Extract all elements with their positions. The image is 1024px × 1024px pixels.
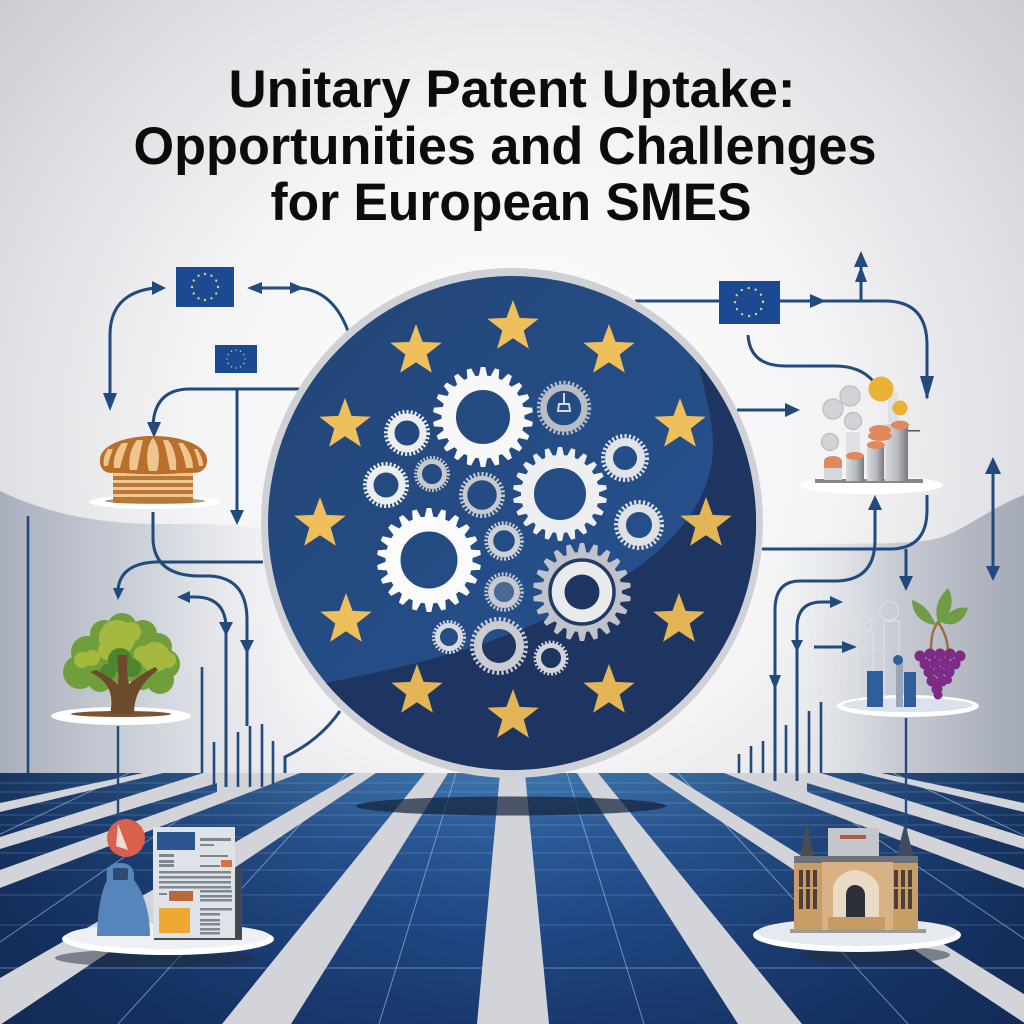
cake on plate <box>89 436 221 509</box>
connector arrows: left <box>110 288 348 822</box>
bottom left disc shadow <box>55 949 255 967</box>
columns <box>846 455 864 481</box>
left hill <box>0 491 320 775</box>
bottom right plate with building <box>753 823 961 952</box>
grey coins <box>822 386 862 450</box>
red sign <box>107 819 145 857</box>
large gear 2 <box>513 447 607 541</box>
right hill <box>760 495 1024 775</box>
EU flag top right <box>719 281 780 324</box>
wireframe chart <box>856 602 899 706</box>
arrowheads on right connectors <box>769 251 1001 690</box>
tiled floor <box>0 773 1024 1024</box>
facade <box>794 860 918 930</box>
bottom left plate with robot and newspaper <box>62 819 274 955</box>
small gears <box>365 382 662 674</box>
spires <box>800 823 814 858</box>
large gear 3 <box>377 508 481 612</box>
newspaper <box>153 827 242 940</box>
stars <box>294 300 732 738</box>
bottom right disc shadow <box>800 946 950 964</box>
sign <box>828 828 879 856</box>
blue bars <box>867 655 916 707</box>
central EU circle <box>261 268 763 778</box>
tree on plate <box>51 613 191 725</box>
blue robot <box>97 863 150 936</box>
shadow under circle <box>356 796 666 816</box>
title: for European SMES <box>270 173 752 232</box>
vertical bars right <box>739 702 821 773</box>
EU flag top left <box>176 267 234 307</box>
vertical bars left <box>28 516 273 787</box>
grape bunch <box>931 622 948 650</box>
chart and grapes on plate <box>837 588 979 717</box>
large gear 4 <box>533 543 631 641</box>
title: Opportunities and Challenges <box>134 117 876 176</box>
EU flag small <box>215 345 257 373</box>
title <box>134 60 876 232</box>
large gear 1 <box>433 367 533 467</box>
coins and columns on plate <box>799 376 943 494</box>
copper coins <box>824 420 909 468</box>
dark crescent <box>326 363 756 770</box>
connector arrows: right <box>635 262 993 835</box>
title: Unitary Patent Uptake: <box>228 60 796 119</box>
arrowheads on left connectors <box>103 281 304 654</box>
floor stripes <box>0 773 1024 1024</box>
